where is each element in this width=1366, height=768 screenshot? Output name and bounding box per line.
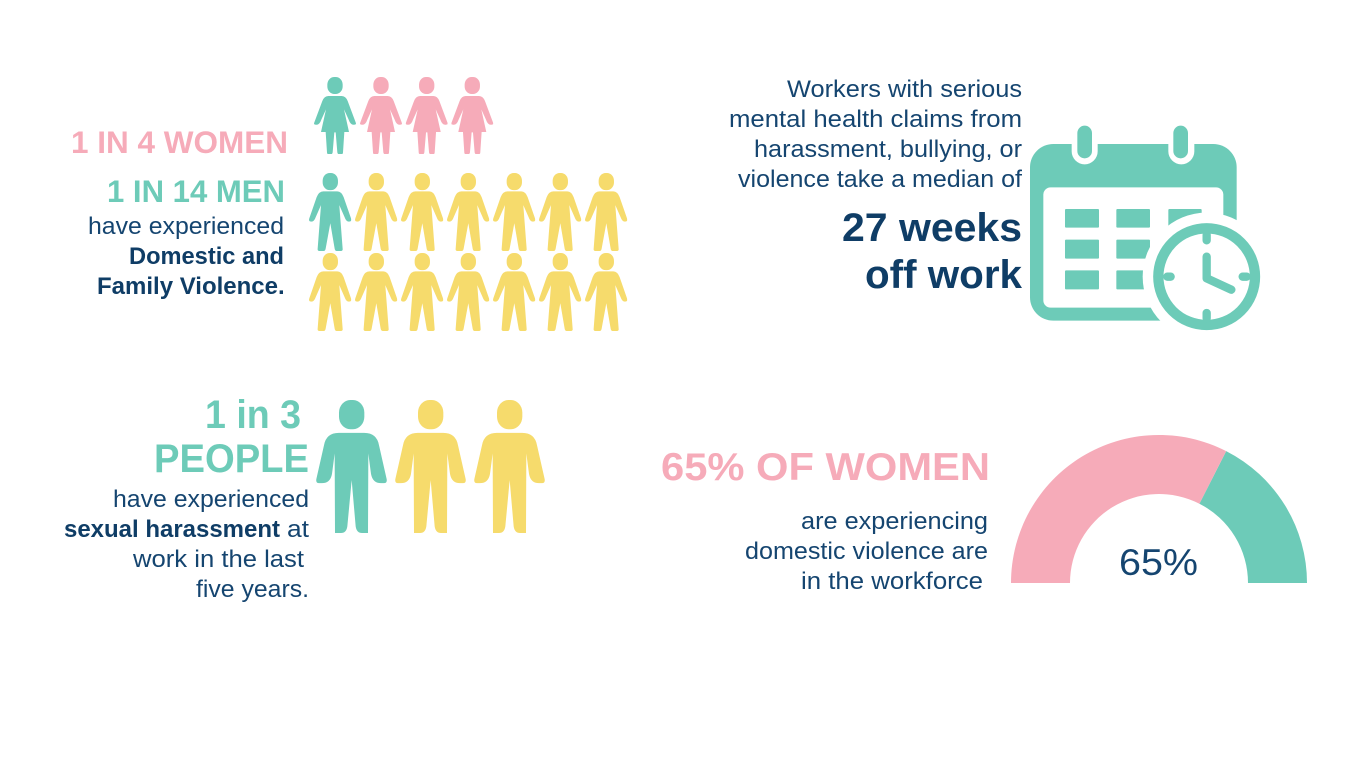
text: domestic violence in the workforce: in the workforce (801, 568, 983, 595)
gauge segment: remainder (1199, 451, 1307, 583)
text: sexual harassment at work: work in the last (132, 546, 304, 573)
statistic: 27 weeks off work: off work (865, 253, 1023, 297)
heading: 65% of women: 65% OF WOMEN (661, 446, 990, 489)
heading: 1 in 3 people (154, 393, 309, 481)
text: workers with serious mental health claims: harassment, bullying, or (754, 136, 1022, 163)
text: domestic and family violence: Family Violence (97, 273, 278, 300)
heading: 1 in 3 people: 1 in 3 (205, 393, 301, 437)
text: sexual harassment at work: five years. (196, 576, 309, 603)
text: sexual harassment at work (64, 486, 309, 603)
pictogram: women, 1 in 4 (314, 77, 493, 154)
heading: 1 in 3 people: PEOPLE (154, 437, 309, 481)
heading: 1 in 4 women: 1 IN 4 WOMEN (71, 124, 288, 160)
text: domestic and family violence: Domestic and (129, 243, 284, 270)
pictogram: men, 1 in 14 (309, 173, 627, 331)
gauge segment: 65 percent (1011, 435, 1226, 583)
text: workers with serious mental health claims: violence take a median of (738, 166, 1022, 193)
text: sexual harassment at work: have experienced (113, 486, 309, 513)
text: workers with serious mental health claims (729, 76, 1022, 193)
text: domestic violence in the workforce: are experiencing (801, 508, 988, 535)
statistic: 27 weeks off work (842, 206, 1023, 297)
statistic: 27 weeks off work: 27 weeks (842, 206, 1022, 250)
icon: calendar with clock (1030, 118, 1271, 341)
gauge value: 65% (1119, 542, 1198, 583)
text: workers with serious mental health claims: Workers with serious (787, 76, 1022, 103)
text: domestic violence in the workforce (745, 508, 988, 595)
text: domestic and family violence: . (278, 273, 285, 300)
heading: 1 in 14 men: 1 IN 14 MEN (107, 173, 285, 209)
text: domestic violence in the workforce: domestic violence are (745, 538, 988, 565)
text: domestic and family violence (88, 213, 285, 300)
chart: 65% half-doughnut gauge (1011, 435, 1307, 583)
text: sexual harassment at work: at (287, 516, 309, 543)
text: sexual harassment at work: sexual harassment (64, 516, 280, 543)
text: domestic and family violence: have experienced (88, 213, 284, 240)
pictogram: people, 1 in 3 (316, 400, 545, 533)
text: workers with serious mental health claims: mental health claims from (729, 106, 1022, 133)
